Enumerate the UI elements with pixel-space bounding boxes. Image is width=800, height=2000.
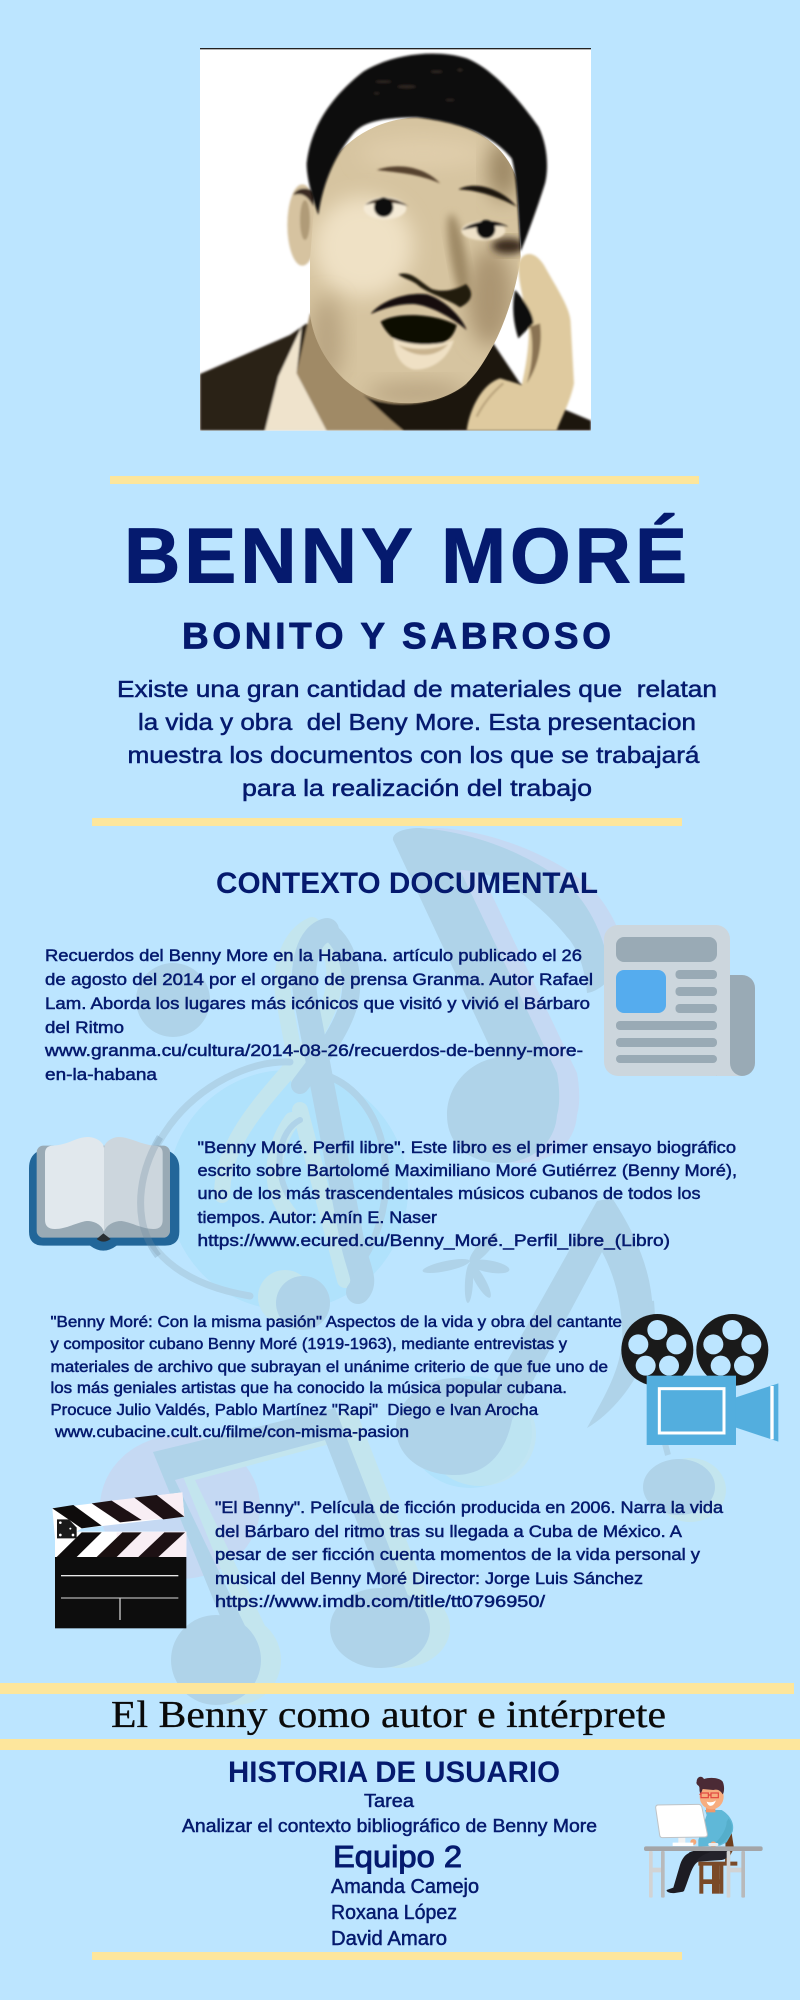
heading: contexto documental: CONTEXTO DOCUMENTAL	[216, 867, 598, 900]
panel: documentary text	[50, 1314, 622, 1441]
panel: documentary text: "Benny Moré: Con la misma pasión" Aspectos de la vida y obra del cantante	[50, 1314, 622, 1331]
title: BENNY MORÉ	[124, 512, 687, 600]
intro text block: la vida y obra del Beny More. Esta presentacion	[138, 709, 696, 735]
photo: portrait of Benny Moré	[200, 48, 591, 431]
panel: film text: del Bárbaro del ritmo tras su llegada a Cuba de México. A	[215, 1522, 683, 1541]
panel: film text: musical del Benny Moré Director: Jorge Luis Sánchez	[215, 1569, 643, 1588]
banner heading: El Benny como autor e intérprete	[111, 1694, 666, 1736]
ear	[287, 184, 317, 266]
task text: Tarea	[364, 1791, 415, 1811]
dark clef	[140, 930, 386, 1296]
panel: book text: tiempos. Autor: Amín E. Naser	[198, 1208, 437, 1227]
panel: book text	[198, 1138, 737, 1250]
hand	[467, 254, 574, 431]
panel: book text: escrito sobre Bartolomé Maximiliano Moré Gutiérrez (Benny Moré),	[198, 1161, 737, 1180]
brows	[377, 166, 440, 183]
divider bar: after intro	[92, 818, 682, 826]
panel: documentary text: y compositor cubano Benny Moré (1919-1963), mediante entrevistas y	[50, 1336, 567, 1353]
team members	[331, 1876, 479, 1950]
panel: film text: "El Benny". Película de ficción producida en 2006. Narra la vida	[215, 1498, 724, 1517]
panel: book text: uno de los más trascendentales músicos cubanos de todos los	[198, 1184, 700, 1203]
beamed note	[173, 1408, 450, 1705]
green clef copy	[222, 925, 345, 1280]
background: music notes watermark	[100, 828, 726, 1705]
intro text block: muestra los documentos con los que se trabajará	[128, 742, 700, 768]
mustache	[371, 294, 467, 330]
icon: newspaper	[604, 925, 755, 1076]
icon: clapperboard	[52, 1492, 186, 1628]
divider bar: above author banner	[0, 1683, 794, 1694]
panel: film text: pesar de ser ficción cuenta momentos de la vida personal y	[215, 1545, 701, 1564]
divider bar: bottom	[92, 1952, 682, 1960]
panel: documentary text: los más geniales artistas que ha conocido la música popular cubana.	[50, 1380, 567, 1397]
panel: book text: "Benny Moré. Perfil libre". Este libro es el primer ensayo biográfico	[198, 1138, 736, 1157]
team members: David Amaro	[331, 1928, 447, 1950]
divider bar: below author banner	[0, 1739, 800, 1750]
divider bar: top	[110, 476, 699, 484]
intro text block	[117, 676, 717, 801]
icon: film camera	[621, 1314, 778, 1445]
panel: newspaper article text: de agosto del 2014 por el organo de prensa Granma. Autor Rafael	[45, 970, 593, 989]
panel: book text: https://www.ecured.cu/Benny_Moré._Perfil_libre_(Libro)	[198, 1231, 670, 1250]
panel: newspaper article text: www.granma.cu/cultura/2014-08-26/recuerdos-de-benny-more-	[44, 1041, 583, 1060]
task text	[182, 1791, 597, 1836]
panel: newspaper article text	[44, 946, 593, 1084]
team heading: Equipo 2	[333, 1839, 462, 1874]
intro text block: Existe una gran cantidad de materiales que relatan	[117, 676, 717, 702]
team members: Roxana López	[331, 1902, 457, 1924]
panel: documentary text: www.cubacine.cult.cu/filme/con-misma-pasion	[54, 1424, 409, 1441]
panel: newspaper article text: del Ritmo	[45, 1018, 124, 1037]
icon: open book	[29, 1137, 179, 1256]
jacket	[200, 322, 328, 431]
star	[422, 1229, 510, 1303]
panel: documentary text: materiales de archivo que subrayan el unánime criterio de que fue uno de	[50, 1359, 608, 1376]
heading: historia de usuario: HISTORIA DE USUARIO	[228, 1756, 560, 1789]
mouth	[381, 315, 457, 347]
panel: film text: https://www.imdb.com/title/tt0796950/	[215, 1592, 545, 1611]
intro text block: para la realización del trabajo	[242, 775, 592, 801]
icon: person at computer	[644, 1777, 763, 1898]
lower right note	[424, 1382, 536, 1486]
team members: Amanda Camejo	[331, 1876, 479, 1898]
panel: documentary text: Procuce Julio Valdés, Pablo Martínez "Rapi" Diego e Ivan Arocha	[50, 1402, 538, 1419]
panel: newspaper article text: Lam. Aborda los lugares más icónicos que visitó y vivió el Bárbaro	[45, 994, 590, 1013]
task text: Analizar el contexto bibliográfico de Benny More	[182, 1816, 597, 1836]
panel: newspaper article text: en-la-habana	[45, 1065, 158, 1084]
eyes	[364, 197, 406, 219]
panel: newspaper article text: Recuerdos del Benny More en la Habana. artículo publicado el 26	[45, 946, 582, 965]
face	[310, 117, 521, 403]
panel: film text	[215, 1498, 724, 1611]
nose	[398, 274, 471, 307]
hair	[307, 54, 547, 252]
neck	[297, 313, 467, 431]
hair highlights	[374, 69, 463, 101]
collar	[265, 327, 327, 431]
subtitle: BONITO Y SABROSO	[182, 616, 611, 656]
